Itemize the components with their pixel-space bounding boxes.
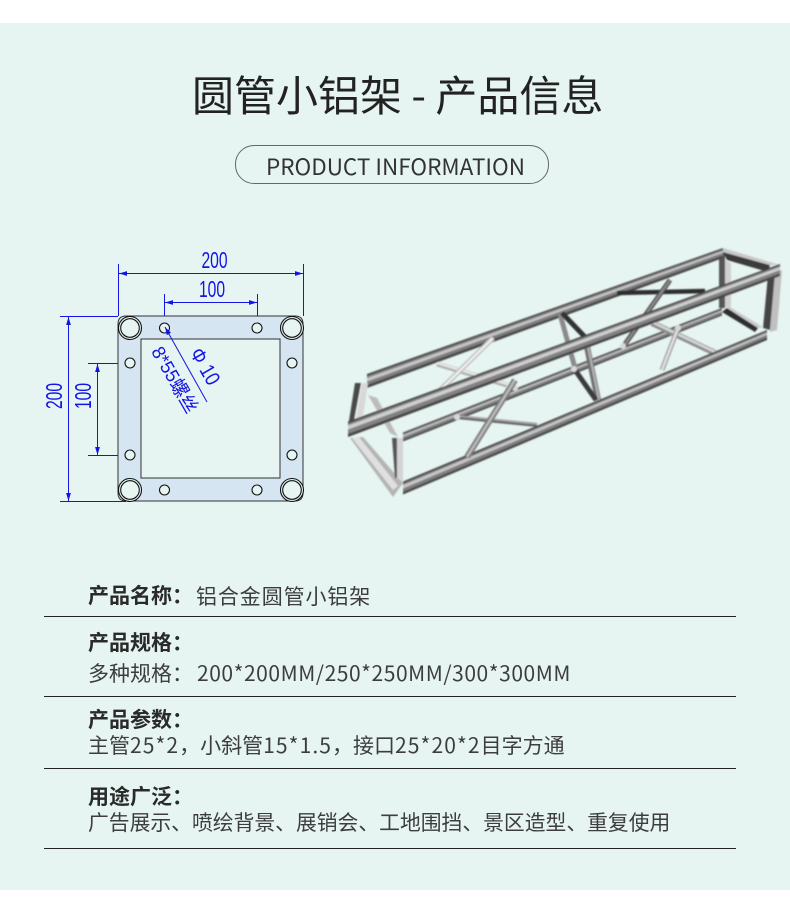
subtitle text: PRODUCT INFORMATION <box>266 150 525 182</box>
label: 产品名称： <box>88 580 193 610</box>
row: product specs <box>88 627 571 688</box>
right end frame front <box>763 270 782 332</box>
truss photo illustration <box>348 248 782 497</box>
label: 用途广泛： <box>88 781 193 811</box>
left end frame <box>348 383 403 497</box>
row: product name <box>88 580 371 611</box>
technical drawing: cross-section with dimensions: 100 <box>199 277 225 303</box>
row: product parameters <box>88 704 565 760</box>
technical drawing: cross-section with dimensions: 200 <box>201 248 228 274</box>
right end frame back <box>719 248 780 332</box>
value: 多种规格：200*200MM/250*250MM/300*300MM <box>88 658 571 688</box>
label: 产品规格： <box>88 627 193 657</box>
technical drawing: cross-section with dimensions: 8*55螺丝 <box>147 343 202 417</box>
back upper rail <box>367 248 723 388</box>
title: 圆管小铝架 - 产品信息 <box>192 63 603 124</box>
technical drawing: cross-section with dimensions: 100 <box>71 383 97 409</box>
back lower rail <box>403 308 722 442</box>
front top rail <box>348 264 780 437</box>
row: uses <box>88 781 670 836</box>
value: 铝合金圆管小铝架 <box>196 581 371 611</box>
value: 广告展示、喷绘背景、展销会、工地围挡、景区造型、重复使用 <box>88 806 670 836</box>
technical drawing: cross-section with dimensions: 200 <box>42 383 68 409</box>
technical drawing: cross-section with dimensions: Φ 10 <box>185 344 225 390</box>
value: 主管25*2，小斜管15*1.5，接口25*20*2目字方通 <box>88 730 565 760</box>
front diagonal brace <box>467 380 515 457</box>
far side diagonal braces <box>435 280 715 425</box>
subtitle pill <box>235 145 549 184</box>
bottom front rail <box>403 330 767 494</box>
label: 产品参数： <box>88 704 193 734</box>
weld joints <box>454 325 681 420</box>
